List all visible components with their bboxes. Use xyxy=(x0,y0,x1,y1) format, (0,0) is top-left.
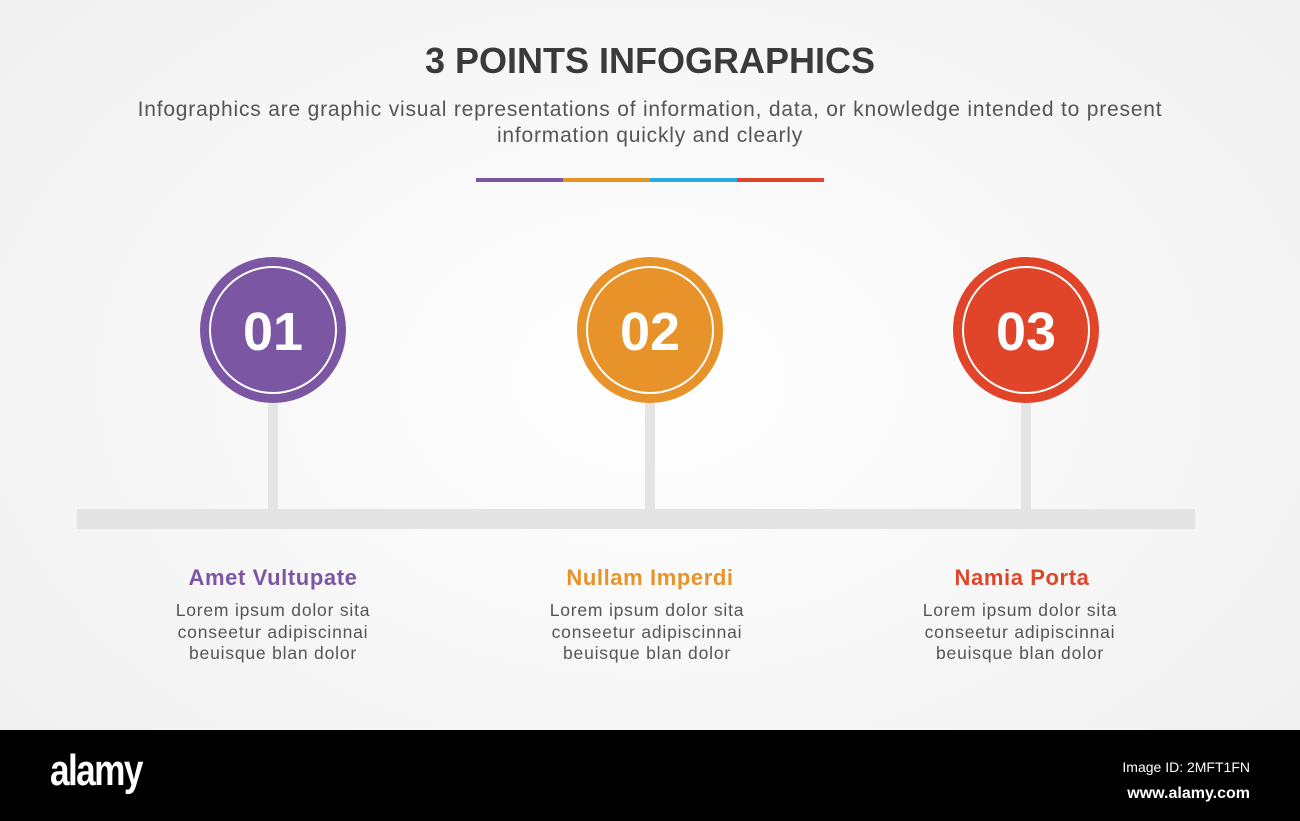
text 3: Lorem ipsum dolor sita xyxy=(923,600,1117,620)
footer id: www.alamy.com xyxy=(1127,785,1250,802)
title: 3 POINTS INFOGRAPHICS xyxy=(425,40,875,81)
footer logo: alamy xyxy=(50,746,142,795)
color bar xyxy=(476,178,824,182)
stem 1 xyxy=(268,402,278,510)
subtitle: information quickly and clearly xyxy=(497,124,803,147)
text 2: Lorem ipsum dolor sita xyxy=(550,600,744,620)
timeline base bar xyxy=(77,509,1195,529)
text 3: conseetur adipiscinnai xyxy=(925,622,1115,642)
stem 2 xyxy=(645,402,655,510)
circle 01 xyxy=(200,257,346,403)
circle 02 xyxy=(577,257,723,403)
text 1 xyxy=(176,600,370,663)
heading 2: Nullam Imperdi xyxy=(566,565,734,590)
stem 3 xyxy=(1021,402,1031,510)
text 2: beuisque blan dolor xyxy=(563,643,731,663)
subtitle: Infographics are graphic visual representations of information, data, or knowledge intended to present xyxy=(138,98,1162,121)
footer id xyxy=(1122,759,1250,802)
heading 1: Amet Vultupate xyxy=(189,565,357,590)
footer id: Image ID: 2MFT1FN xyxy=(1122,759,1250,775)
text 3 xyxy=(923,600,1117,663)
circle 01: 01 xyxy=(243,302,303,362)
text 2 xyxy=(550,600,744,663)
text 3: beuisque blan dolor xyxy=(936,643,1104,663)
text 1: Lorem ipsum dolor sita xyxy=(176,600,370,620)
circle 03 xyxy=(953,257,1099,403)
footer xyxy=(0,730,1300,821)
heading 3: Namia Porta xyxy=(954,565,1089,590)
circle 03: 03 xyxy=(996,302,1056,362)
text 1: beuisque blan dolor xyxy=(189,643,357,663)
circle 02: 02 xyxy=(620,302,680,362)
text 1: conseetur adipiscinnai xyxy=(178,622,368,642)
text 2: conseetur adipiscinnai xyxy=(552,622,742,642)
subtitle xyxy=(138,98,1162,147)
